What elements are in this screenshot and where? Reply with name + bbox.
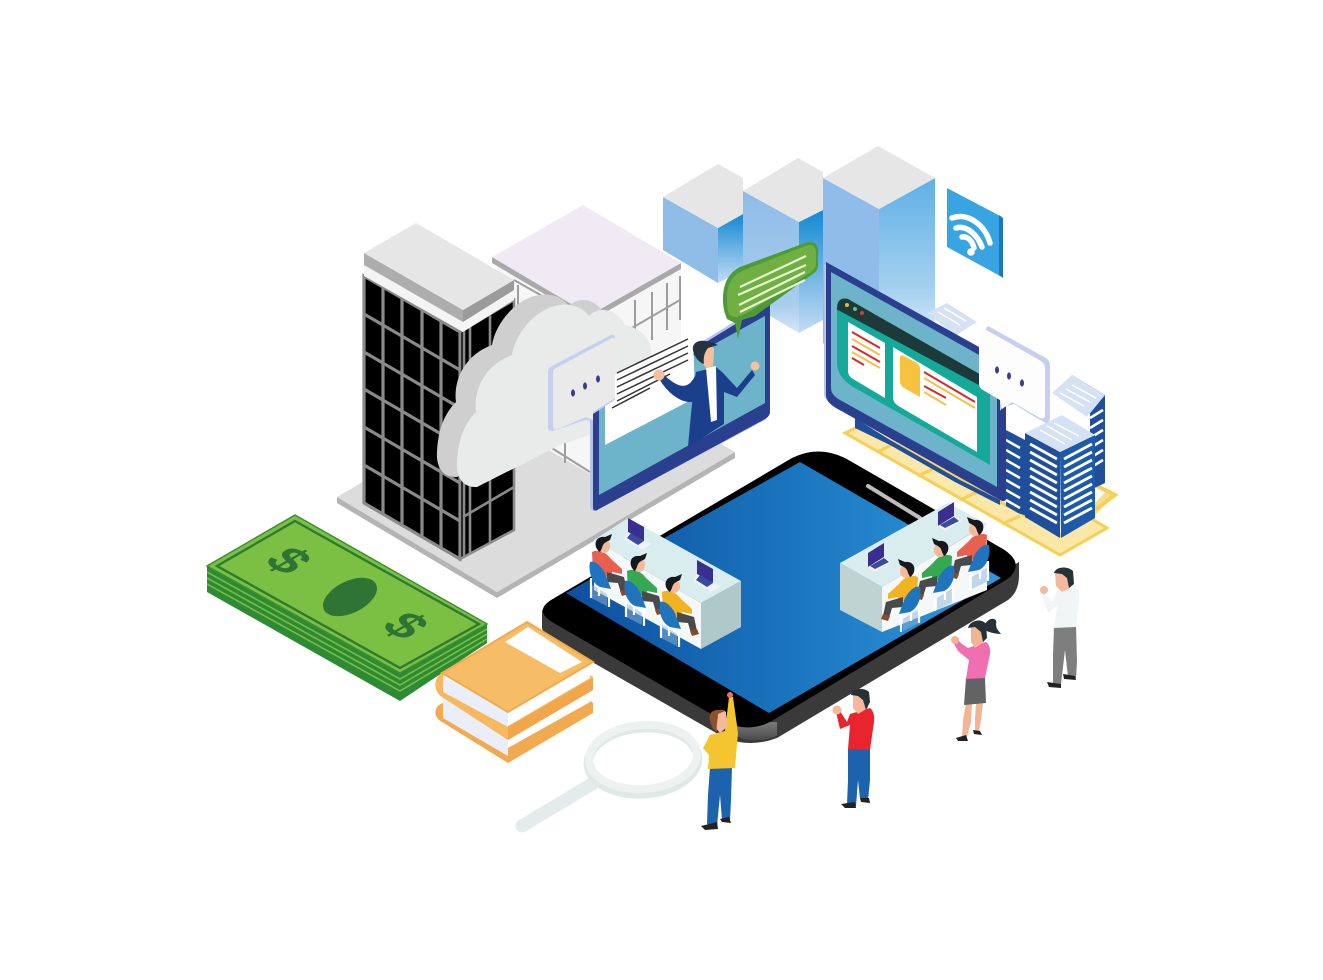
left desk [594,518,741,649]
laptop 2 [868,543,892,572]
wifi tile [947,188,1003,278]
left chat bubble [548,335,615,431]
blue data tower 1 [663,164,743,283]
student green [915,538,955,611]
lower book [435,690,593,763]
rack back top [927,303,977,336]
speaker slot [868,486,920,518]
cloud face [457,305,651,487]
upper book [435,622,593,740]
phone screen [566,462,1001,713]
rack front [1025,415,1095,538]
yellow server platform [845,425,1115,555]
person yellow shirt [701,692,738,830]
banknote oval [317,570,383,624]
low white building [492,205,681,474]
browser window [837,298,990,465]
phone body [543,452,1016,728]
person red shirt [832,689,874,808]
blue data tower 2 [743,158,823,333]
tall black tower [364,223,514,559]
stack of banknotes [207,515,487,701]
person pink top [951,619,1001,741]
dollar sign 1: $ [252,540,325,581]
right desk group [840,502,990,632]
right web monitor [824,262,1006,505]
laptop 1 [938,502,962,531]
cloud side [437,295,626,477]
green speech bubble [723,242,818,339]
student red [950,517,990,590]
monitor stand [855,418,1000,505]
student yellow [881,559,921,632]
laptop 2 [693,560,721,592]
student green [624,553,664,626]
left video monitor [590,300,770,511]
rack left [1006,430,1027,516]
left desk group [589,518,741,649]
student red [589,534,629,607]
rack right [1052,375,1105,490]
cloud [437,295,651,487]
server racks [927,303,1105,538]
right chat bubble [979,326,1050,423]
smartphone [542,452,1019,743]
blue data tower 3 [823,146,935,375]
dollar sign 2: $ [369,605,442,646]
right desk [840,503,987,632]
presenter [654,341,760,447]
building slab [337,357,735,598]
magnifying glass [522,721,700,826]
phone side [542,562,1019,743]
books [435,622,593,763]
person white shirt [1040,567,1079,688]
laptop 1 [624,518,652,550]
student yellow [659,574,699,647]
lesson board [605,332,695,445]
